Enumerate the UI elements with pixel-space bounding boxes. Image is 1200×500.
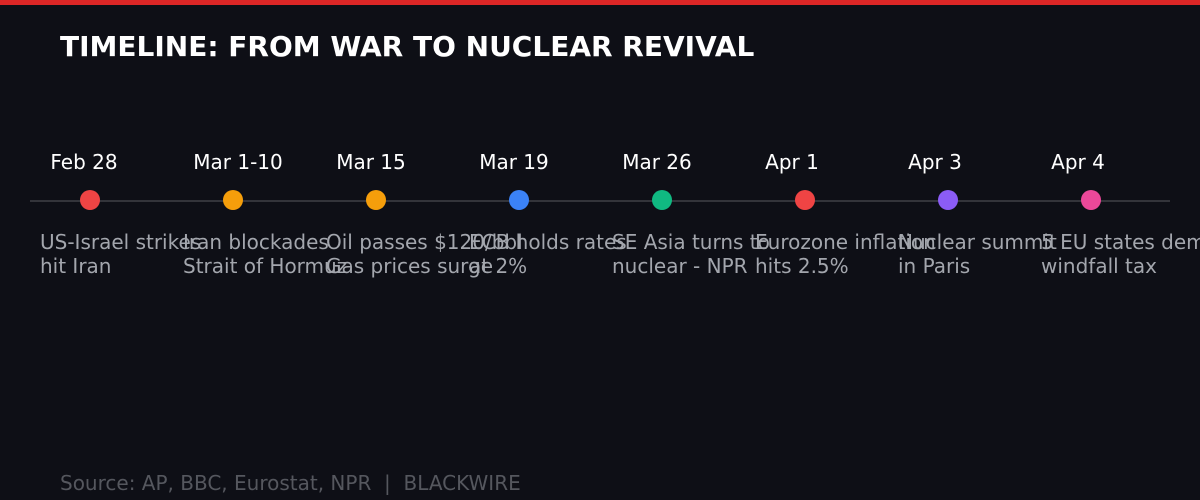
event: Feb 28 <box>40 150 201 278</box>
event: Feb 28: hit Iran <box>40 254 111 278</box>
event: Mar 26 <box>612 150 770 278</box>
event: Apr 1: hits 2.5% <box>755 254 849 278</box>
event: Mar 19: at 2% <box>469 254 527 278</box>
event: Apr 3: Nuclear summit <box>898 230 1057 254</box>
event: Mar 15: Oil passes $120/bbl <box>326 230 523 254</box>
event: Apr 1: Eurozone inflation <box>755 230 936 254</box>
event: Apr 1 <box>755 150 936 278</box>
event: Apr 3: Apr 3 <box>908 150 962 174</box>
event: Mar 26: nuclear - NPR <box>612 254 748 278</box>
event: Mar 19: ECB holds rates <box>469 230 627 254</box>
event: Apr 4 <box>1041 150 1200 278</box>
event: Mar 15: Gas prices surge <box>326 254 493 278</box>
event: Apr 3 <box>898 150 1057 278</box>
event: Mar 15: Mar 15 <box>336 150 406 174</box>
event: Apr 4: windfall tax <box>1041 254 1157 278</box>
event: Mar 1-10: Strait of Hormuz <box>183 254 347 278</box>
event: Feb 28: Feb 28 <box>50 150 118 174</box>
event: Mar 1-10: Iran blockades <box>183 230 329 254</box>
event: Feb 28: US-Israel strikes <box>40 230 201 254</box>
event: Apr 3: in Paris <box>898 254 970 278</box>
event: Apr 1: Apr 1 <box>765 150 819 174</box>
event: Mar 1-10: Mar 1-10 <box>193 150 283 174</box>
event: Mar 15 <box>326 150 523 278</box>
event: Mar 26: SE Asia turns to <box>612 230 770 254</box>
source footer: Source: AP, BBC, Eurostat, NPR | BLACKWIRE <box>60 471 521 495</box>
event: Mar 26: Mar 26 <box>622 150 692 174</box>
event: Apr 4: Apr 4 <box>1051 150 1105 174</box>
title: TIMELINE: FROM WAR TO NUCLEAR REVIVAL <box>60 30 755 63</box>
event: Mar 19 <box>469 150 627 278</box>
event: Mar 19: Mar 19 <box>479 150 549 174</box>
event: Mar 1-10 <box>183 150 347 278</box>
